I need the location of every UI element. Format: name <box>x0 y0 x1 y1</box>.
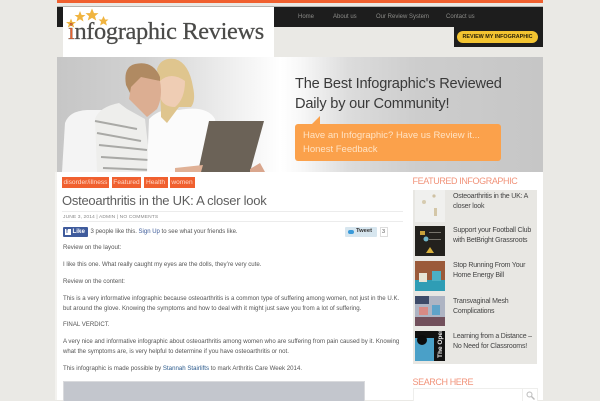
featured title 2 <box>453 226 531 244</box>
post meta: JUNE 3, 2014 | ADMIN | NO COMMENTS <box>63 215 158 220</box>
featured title 4 <box>453 298 508 314</box>
tag: disorder/illness: disorder/illness <box>64 179 107 186</box>
tag: women: women <box>171 179 193 186</box>
featured title 5: No Need for Classrooms! <box>453 342 527 350</box>
featured title 3: Home Energy Bill <box>453 272 504 278</box>
verdict text: A very nice and informative infographic about osteoarthritis among women who are suffering from pain caused by it. Knowing <box>63 338 399 345</box>
content comment: This is a very informative infographic because osteoarthritis is a common type of suffering among women, not just in the U.K. <box>63 295 399 302</box>
nav link: review system: Our Review System <box>376 14 429 20</box>
top orange bar <box>57 0 543 3</box>
divider <box>62 211 403 212</box>
thumbnail: osteoarthritis <box>415 190 445 222</box>
sidebar panel <box>407 172 543 400</box>
thumbnail: the open university <box>415 331 445 361</box>
featured title 5 <box>453 332 532 350</box>
featured title 3: Stop Running From Your <box>453 262 525 269</box>
tweet count: 3 <box>382 229 385 235</box>
featured title 1: Osteoarthritis in the UK: A <box>453 193 528 200</box>
hero headline: The Best Infographic's Reviewed <box>295 76 502 92</box>
final verdict: FINAL VERDICT. <box>63 321 110 328</box>
hero photo: couple with laptop <box>62 58 265 172</box>
article title: Osteoarthritis in the UK: A closer look <box>62 193 266 208</box>
callout pointer <box>312 116 320 124</box>
content comment: but around the glove. Knowing the symptoms and how to deal with it might just save you from a lot of suffering. <box>63 304 361 312</box>
callout text: Honest Feedback <box>303 144 377 155</box>
button: review my infographic <box>457 30 538 42</box>
tag: featured <box>112 177 141 188</box>
featured title 2: with BetBright Grassroots <box>453 236 527 244</box>
thin header rule <box>57 6 543 7</box>
tag: health: Health <box>146 179 165 186</box>
tag: women <box>170 177 194 188</box>
callout text: Have an Infographic? Have us Review it... <box>303 130 480 140</box>
tag: disorder/illness <box>62 177 109 188</box>
search button divider <box>522 389 523 401</box>
facebook f icon <box>64 229 70 235</box>
credit line: This infographic is made possible by Stannah Stairlifts to mark Arthritis Care Week 2014. <box>63 365 302 372</box>
hero headline: Daily by our Community! <box>295 96 449 112</box>
verdict text <box>63 338 399 354</box>
tweet button <box>345 227 377 236</box>
button: review my infographic: REVIEW MY INFOGRAPHIC <box>462 34 532 40</box>
featured title 5: Learning from a Distance – <box>453 333 532 340</box>
nav link: about: About us <box>333 14 357 20</box>
featured title 4: Transvaginal Mesh <box>453 298 508 305</box>
search box <box>412 388 538 401</box>
tweet count <box>380 227 388 237</box>
thumbnail: football club <box>415 226 445 256</box>
nav link: contact: Contact us <box>446 14 475 20</box>
featured title 1 <box>453 192 528 210</box>
infographic preview <box>63 381 365 401</box>
tag: featured: Featured <box>113 179 140 186</box>
featured title 1: closer look <box>453 202 484 210</box>
thumbnail: energy bill <box>415 261 445 291</box>
facebook f icon: f <box>66 229 68 235</box>
tag: health <box>144 177 168 188</box>
twitter bird icon <box>348 230 354 234</box>
review button panel <box>454 26 543 47</box>
content comment <box>63 295 399 312</box>
left page margin strip <box>55 172 57 400</box>
hero banner <box>57 57 543 172</box>
logo wordmark: infographic Reviews <box>68 18 264 45</box>
facebook like text: 3 people like this. Sign Up to see what your friends like. <box>90 228 238 234</box>
nav link: home: Home <box>298 14 314 20</box>
logo stars <box>66 8 108 28</box>
featured title 2: Support your Football Club <box>453 227 531 234</box>
featured title 3 <box>453 262 526 278</box>
featured list panel <box>412 190 537 364</box>
layout comment: I like this one. What really caught my eyes are the dolls, they’re very cute. <box>63 261 261 268</box>
navigation bar <box>57 7 543 26</box>
sidebar heading: featured infographic: FEATURED INFOGRAPHIC <box>412 176 517 186</box>
search icon <box>526 392 535 400</box>
tweet button: Tweet <box>356 228 372 234</box>
facebook like button <box>62 227 88 237</box>
orange speech callout <box>295 124 501 160</box>
featured title 4: Complications <box>453 308 494 314</box>
review on layout: Review on the layout: <box>63 244 121 251</box>
review on content: Review on the content: <box>63 278 125 285</box>
thumbnail: mesh complications <box>415 296 445 326</box>
logo panel <box>63 7 274 57</box>
sidebar heading: search here: SEARCH HERE <box>412 377 473 387</box>
category tags <box>62 177 195 188</box>
callout text <box>303 130 480 155</box>
verdict text: what the symptoms are, is very helpful to determine if you have osteoarthritis or not. <box>63 348 289 354</box>
divider <box>62 221 403 222</box>
hero headline <box>295 76 502 112</box>
main content panel <box>57 172 407 400</box>
facebook like button: Like <box>72 228 85 235</box>
